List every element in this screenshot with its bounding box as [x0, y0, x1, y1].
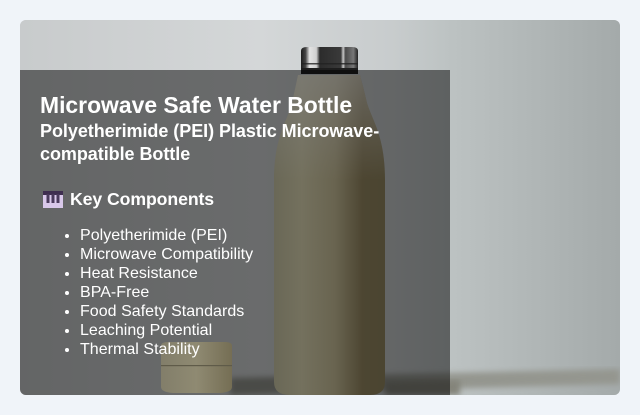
bottle [274, 47, 385, 395]
list: key components: Thermal Stability [80, 341, 200, 358]
list: key components: BPA-Free [80, 284, 149, 301]
subtitle: Polyetherimide (PEI) Plastic Microwave-compatible Bottle [40, 121, 379, 164]
jar [161, 342, 232, 393]
icon: piano keyboard [43, 191, 63, 208]
heading: key components: Key Components [70, 189, 214, 209]
list: key components [65, 227, 254, 358]
list: key components: Microwave Compatibility [80, 246, 253, 263]
list: key components: Heat Resistance [80, 265, 198, 282]
title: Microwave Safe Water Bottle [40, 92, 352, 118]
bottle cap [301, 47, 358, 74]
list: key components: Leaching Potential [80, 322, 212, 339]
floor shadow [230, 369, 620, 395]
panel: translucent text overlay [20, 70, 450, 395]
list: key components: Food Safety Standards [80, 303, 244, 320]
list: key components: Polyetherimide (PEI) [80, 227, 227, 244]
